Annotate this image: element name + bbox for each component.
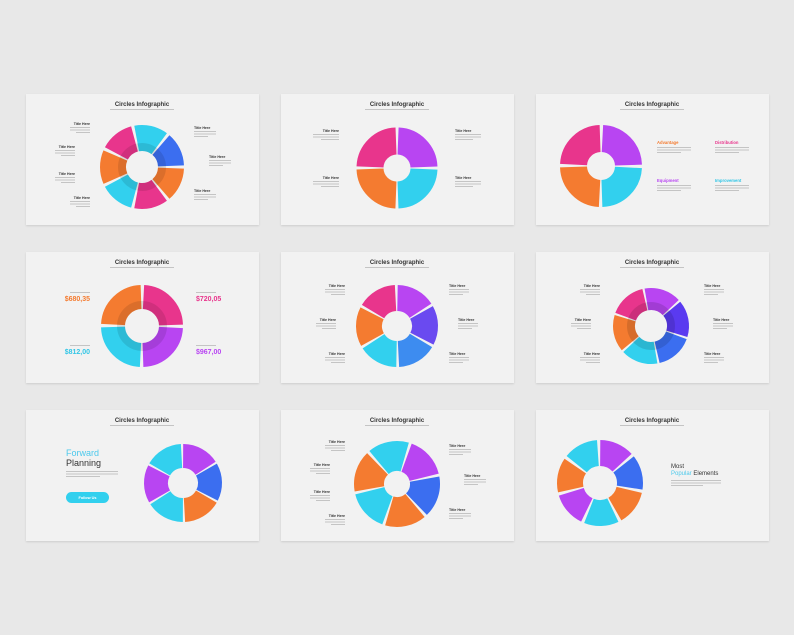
donut chart: [112, 296, 172, 356]
title: Circles Infographic: [625, 260, 680, 266]
labels: Advantage: [657, 140, 679, 145]
slide 8: swirl: Title Here: [449, 508, 465, 512]
title: Circles Infographic: [625, 418, 680, 424]
labels: Distribution: [715, 140, 739, 145]
donut chart: [359, 288, 435, 364]
title: Circles Infographic: [370, 418, 425, 424]
slide 9: most popular elements: [536, 410, 769, 541]
text blocks left: Title Here: [59, 172, 75, 176]
title: Circles Infographic: [370, 102, 425, 108]
labels: Equipment: [657, 178, 679, 183]
slide 6: six segment shaded ring: [536, 252, 769, 383]
slide 2: four quadrant pie: Title Here: [455, 176, 471, 180]
title: Circles Infographic: [115, 102, 170, 108]
slide 4: four segments with values: [26, 252, 259, 383]
slide 5: six segment ring: Title Here: [458, 318, 474, 322]
title: Circles Infographic: [370, 260, 425, 266]
text blocks left: Title Here: [74, 196, 90, 200]
values: $812,00: [65, 349, 90, 356]
text blocks: Title Here: [575, 318, 591, 322]
text blocks: Title Here: [314, 490, 330, 494]
values: $680,35: [65, 296, 90, 303]
slide 7: forward planning spiral: Planning: [66, 458, 101, 468]
text blocks: [313, 129, 339, 187]
text blocks: Title Here: [329, 440, 345, 444]
text blocks: Title Here: [584, 352, 600, 356]
slide 5: six segment ring: Title Here: [449, 284, 465, 288]
text blocks: [310, 440, 345, 525]
text blocks: Title Here: [329, 514, 345, 518]
text blocks: Title Here: [584, 284, 600, 288]
text blocks left: Title Here: [59, 145, 75, 149]
labels: [657, 140, 749, 191]
slide 6: six segment shaded ring: Title Here: [704, 284, 720, 288]
text blocks: Title Here: [320, 318, 336, 322]
slide 6: six segment shaded ring: Title Here: [704, 352, 720, 356]
slide 2: four quadrant pie: Title Here: [455, 129, 471, 133]
slide 3: quadrant with labels: [536, 94, 769, 225]
text blocks right: Title Here: [209, 155, 225, 159]
slide 2: four quadrant pie: [281, 94, 514, 225]
button: Follow Us: [79, 496, 96, 500]
text blocks: Title Here: [329, 284, 345, 288]
slide 7: forward planning spiral: [26, 410, 259, 541]
slide 6: six segment shaded ring: Title Here: [713, 318, 729, 322]
spiral chart: [146, 446, 220, 520]
button: [66, 492, 109, 503]
slide 1: seven segment ring: [26, 94, 259, 225]
donut chart: [613, 288, 689, 364]
labels: Improvement: [715, 178, 742, 183]
values: $720,05: [196, 296, 221, 303]
text blocks left: [55, 122, 90, 207]
title: Circles Infographic: [115, 260, 170, 266]
swirl chart: [358, 445, 436, 523]
slide 5: six segment ring: Title Here: [449, 352, 465, 356]
title: Circles Infographic: [625, 102, 680, 108]
quadrant chart: [369, 140, 425, 196]
quadrant chart: [572, 137, 630, 195]
text blocks right: Title Here: [194, 189, 210, 193]
donut chart: [101, 126, 183, 208]
text blocks: Title Here: [329, 352, 345, 356]
values: [65, 292, 221, 356]
slide 5: six segment ring: [281, 252, 514, 383]
heading: Most: [671, 464, 684, 470]
slide 8: swirl: Title Here: [464, 474, 480, 478]
heading: Forward: [66, 448, 99, 458]
slide 8: swirl: Title Here: [449, 444, 465, 448]
text blocks right: [194, 126, 231, 200]
text blocks: Title Here: [323, 129, 339, 133]
text blocks right: Title Here: [194, 126, 210, 130]
title: Circles Infographic: [115, 418, 170, 424]
text blocks: [571, 284, 600, 363]
values: $967,00: [196, 349, 221, 356]
text blocks: Title Here: [323, 176, 339, 180]
slide 9: most popular elements: Popular Elements: [671, 471, 718, 477]
text blocks: [316, 284, 345, 363]
slide 8: swirl: [281, 410, 514, 541]
donut chart: [558, 441, 642, 525]
text blocks: Title Here: [314, 463, 330, 467]
text blocks left: Title Here: [74, 122, 90, 126]
